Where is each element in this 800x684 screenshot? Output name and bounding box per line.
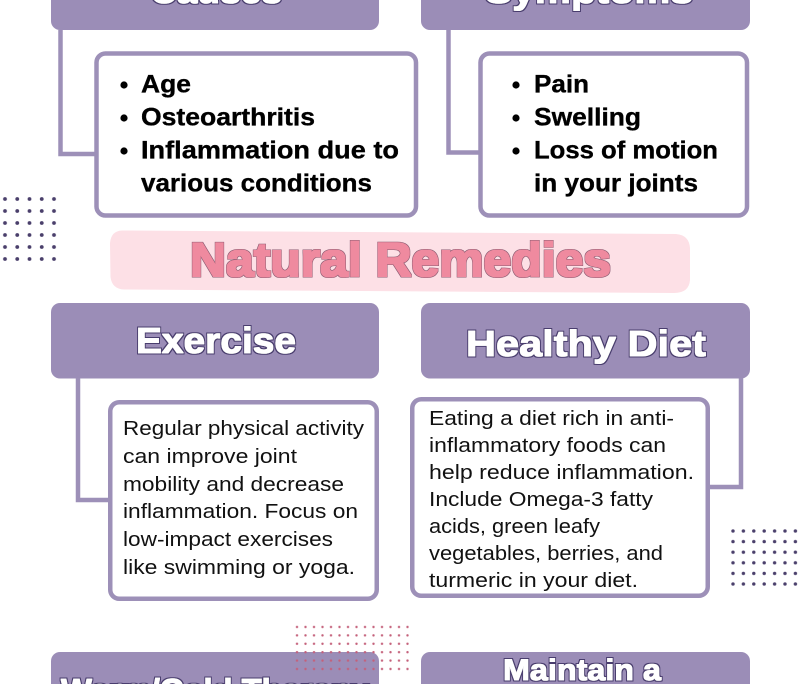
exercise heading text: Exercise bbox=[136, 320, 296, 361]
banner text: Natural Remedies bbox=[190, 233, 611, 286]
panel: exercise bbox=[51, 303, 379, 599]
exercise heading bar bbox=[51, 303, 379, 378]
symptoms list box bbox=[480, 54, 747, 216]
causes heading bar bbox=[51, 0, 379, 30]
causes list: Osteoarthritis bbox=[141, 104, 315, 132]
healthy diet description: acids, green leafy bbox=[429, 516, 600, 538]
healthy diet description: Eating a diet rich in anti- bbox=[429, 408, 674, 430]
symptoms list bbox=[512, 70, 718, 198]
healthy diet heading text: Healthy Diet bbox=[466, 323, 706, 364]
healthy diet text box bbox=[412, 399, 708, 596]
pink brush banner bbox=[110, 230, 690, 293]
exercise description bbox=[123, 418, 364, 579]
symptoms list: Loss of motion bbox=[534, 136, 718, 164]
symptoms connector bbox=[448, 30, 480, 152]
exercise text box bbox=[110, 402, 377, 599]
symptoms list: in your joints bbox=[534, 170, 698, 198]
warm/cold heading bar bbox=[51, 652, 379, 684]
causes list: various conditions bbox=[141, 170, 372, 198]
healthy diet description: Include Omega-3 fatty bbox=[429, 489, 653, 511]
healthy diet description: turmeric in your diet. bbox=[429, 570, 638, 592]
symptoms list: Swelling bbox=[534, 104, 641, 132]
healthy diet connector bbox=[706, 378, 741, 487]
decorative dots: right purple grid bbox=[728, 526, 800, 589]
causes list: Inflammation due to bbox=[141, 136, 399, 164]
healthy diet description: help reduce inflammation. bbox=[429, 462, 694, 484]
exercise description: inflammation. Focus on bbox=[123, 501, 358, 523]
panel: healthy diet bbox=[412, 303, 750, 596]
section title: natural remedies bbox=[110, 230, 690, 293]
healthy diet description: inflammatory foods can bbox=[429, 435, 666, 457]
exercise connector bbox=[78, 378, 110, 500]
panel: warm/cold therapy bbox=[51, 652, 379, 684]
healthy diet description bbox=[429, 408, 694, 592]
decorative dots: pink grid bbox=[293, 623, 412, 673]
causes list bbox=[120, 70, 399, 198]
panel: symptoms bbox=[421, 0, 750, 216]
exercise description: can improve joint bbox=[123, 446, 298, 468]
panel: maintain a healthy weight bbox=[421, 652, 750, 684]
symptoms list: Pain bbox=[534, 70, 589, 98]
maintain heading bar bbox=[421, 652, 750, 684]
exercise description: Regular physical activity bbox=[123, 418, 364, 440]
panel: causes bbox=[51, 0, 416, 216]
healthy diet description: vegetables, berries, and bbox=[429, 543, 663, 565]
healthy diet heading bar bbox=[421, 303, 750, 378]
symptoms heading bar bbox=[421, 0, 750, 30]
causes list box bbox=[96, 54, 416, 216]
causes connector bbox=[60, 30, 96, 154]
causes list: Age bbox=[141, 70, 191, 98]
exercise description: low-impact exercises bbox=[123, 529, 333, 551]
decorative dots: left purple grid bbox=[0, 193, 60, 265]
exercise description: like swimming or yoga. bbox=[123, 557, 355, 579]
exercise description: mobility and decrease bbox=[123, 474, 344, 496]
